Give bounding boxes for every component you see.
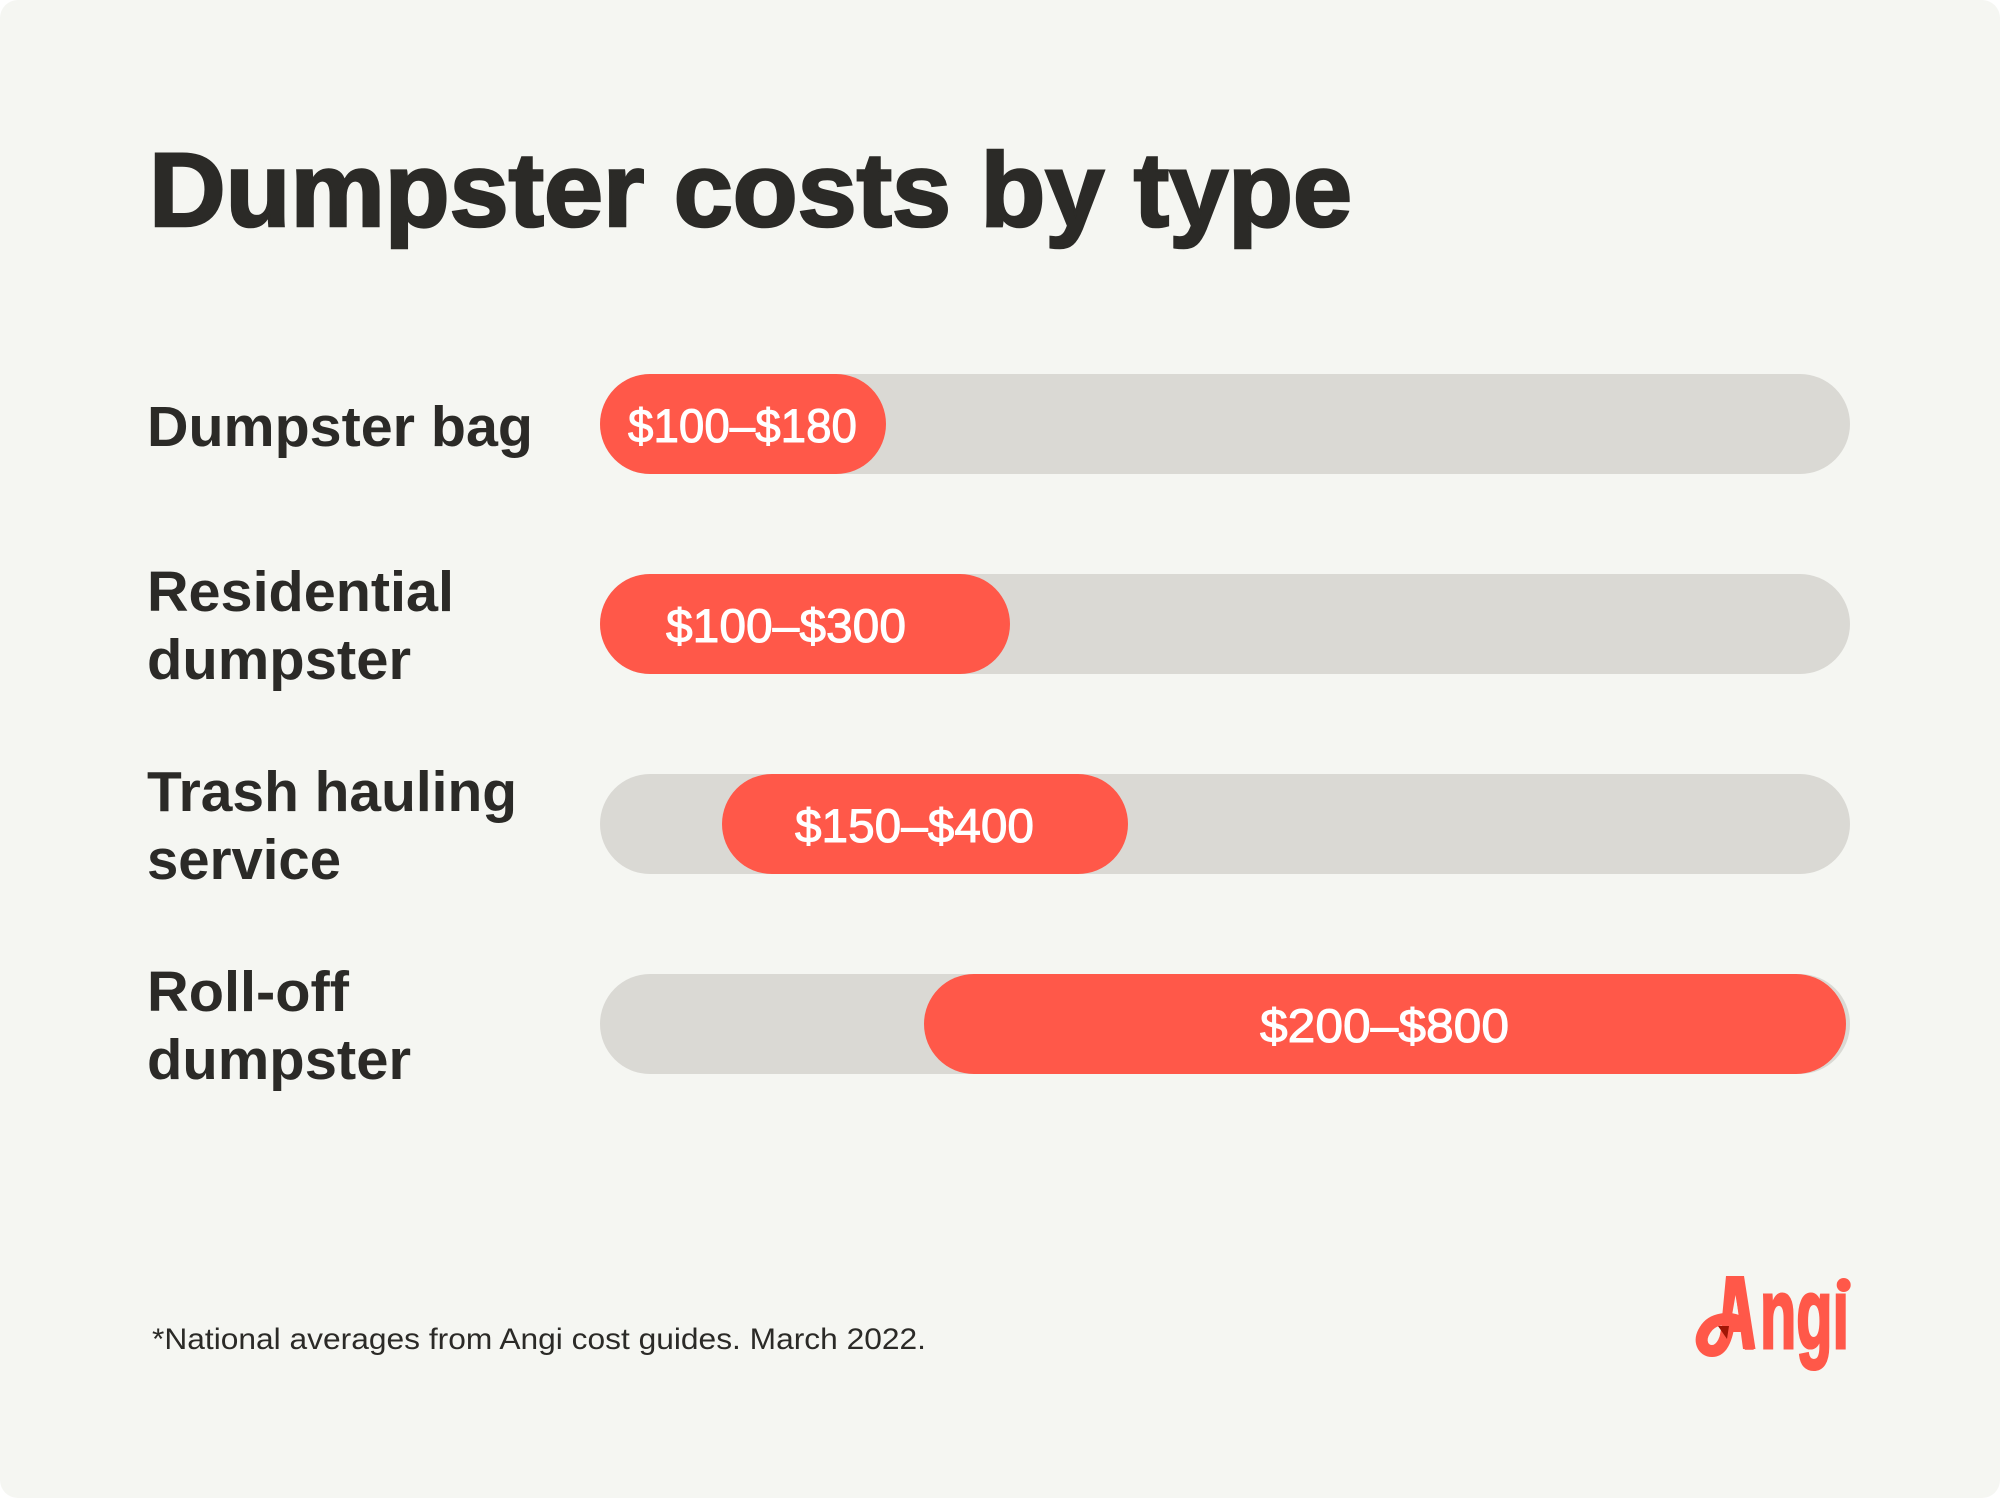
title: Dumpster costs by type xyxy=(149,132,1352,249)
label: residential dumpster: Residential xyxy=(147,560,454,624)
row: residential dumpster xyxy=(147,560,1850,692)
label: trash hauling service: service xyxy=(147,828,341,892)
row: roll-off dumpster xyxy=(147,960,1850,1092)
footnote: *National averages from Angi cost guides. March 2022. xyxy=(152,1323,926,1356)
range bar: trash hauling service xyxy=(722,774,1128,874)
label: dumpster bag: Dumpster bag xyxy=(147,395,533,459)
label: roll-off dumpster: dumpster xyxy=(147,1028,411,1092)
range bar: dumpster bag xyxy=(600,374,886,474)
chart: cost ranges by dumpster type xyxy=(147,374,1850,1092)
range bar: roll-off dumpster xyxy=(924,974,1846,1074)
row: dumpster bag xyxy=(147,374,1850,474)
logo: Angi xyxy=(1702,1258,1854,1370)
track: trash hauling service xyxy=(600,774,1850,874)
label: residential dumpster: dumpster xyxy=(147,628,411,692)
value: trash hauling service: $150–$400 xyxy=(795,799,1034,852)
track: residential dumpster xyxy=(600,574,1850,674)
value: residential dumpster: $100–$300 xyxy=(666,599,906,652)
row: trash hauling service xyxy=(147,760,1850,892)
range bar: residential dumpster xyxy=(600,574,1010,674)
value: dumpster bag: $100–$180 xyxy=(628,399,857,452)
logo: Angi: A xyxy=(1717,1258,1754,1370)
label: trash hauling service: Trash hauling xyxy=(147,760,517,824)
track: dumpster bag xyxy=(600,374,1850,474)
value: roll-off dumpster: $200–$800 xyxy=(1260,999,1509,1052)
label: roll-off dumpster: Roll-off xyxy=(147,960,350,1024)
logo: Angi: ngi xyxy=(1760,1258,1849,1370)
track: roll-off dumpster xyxy=(600,974,1850,1074)
